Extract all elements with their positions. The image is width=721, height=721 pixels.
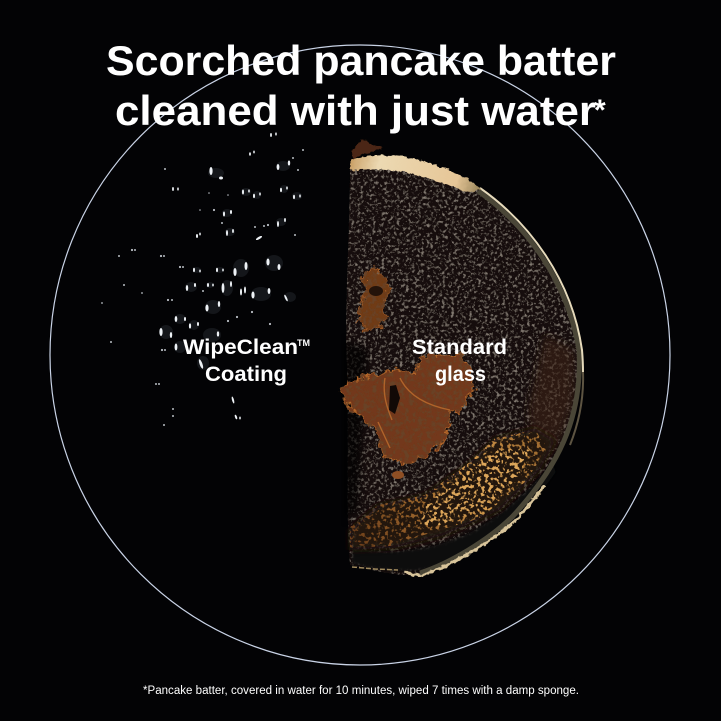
blob: crevice (389, 385, 400, 414)
burnt base (346, 162, 581, 575)
blob: small batter hole (369, 286, 383, 296)
pale crust line lower edge (570, 372, 583, 445)
title: Scorched pancake batter (106, 37, 616, 84)
label: WipeClean Coating (183, 336, 310, 386)
label: Standard glass (412, 336, 507, 386)
label: WipeClean Coating: Coating (205, 363, 287, 386)
blob: large burnt batter (340, 354, 475, 463)
label: WipeClean Coating: WipeClean (183, 336, 298, 359)
burnt fragment at top left (352, 138, 383, 160)
large droplets (159, 161, 302, 370)
title: * (594, 94, 606, 127)
droplet highlights (159, 132, 301, 420)
rust patch along right side (528, 335, 574, 465)
title (106, 37, 616, 134)
golden crumbs base (350, 428, 556, 550)
panel: standard glass burnt pancake (340, 138, 583, 576)
outer crust right edge (420, 191, 579, 573)
bottom dark band (352, 462, 556, 571)
title: cleaned with just water (115, 87, 596, 134)
panel: WipeClean water droplets (101, 132, 304, 426)
blob: orange fold (378, 378, 450, 448)
bottom left crust flecks (352, 567, 398, 570)
label: Standard glass: glass (435, 363, 486, 386)
blob: small burnt batter (357, 268, 390, 333)
pale crust bottom (404, 486, 545, 576)
darker fade at left edge (344, 340, 368, 520)
glass circle outline (50, 45, 670, 665)
label: WipeClean Coating: TM (297, 338, 310, 348)
golden crumbs (350, 430, 548, 548)
footnote: *Pancake batter, covered in water for 10 minutes, wiped 7 times with a damp sponge. (143, 685, 579, 697)
label: Standard glass: Standard (412, 336, 507, 359)
top cream crust (350, 155, 482, 192)
tiny droplets (101, 149, 304, 426)
pale crust line right edge (480, 188, 583, 372)
bright crumb band (420, 448, 530, 525)
small crumb below blob (392, 471, 404, 479)
